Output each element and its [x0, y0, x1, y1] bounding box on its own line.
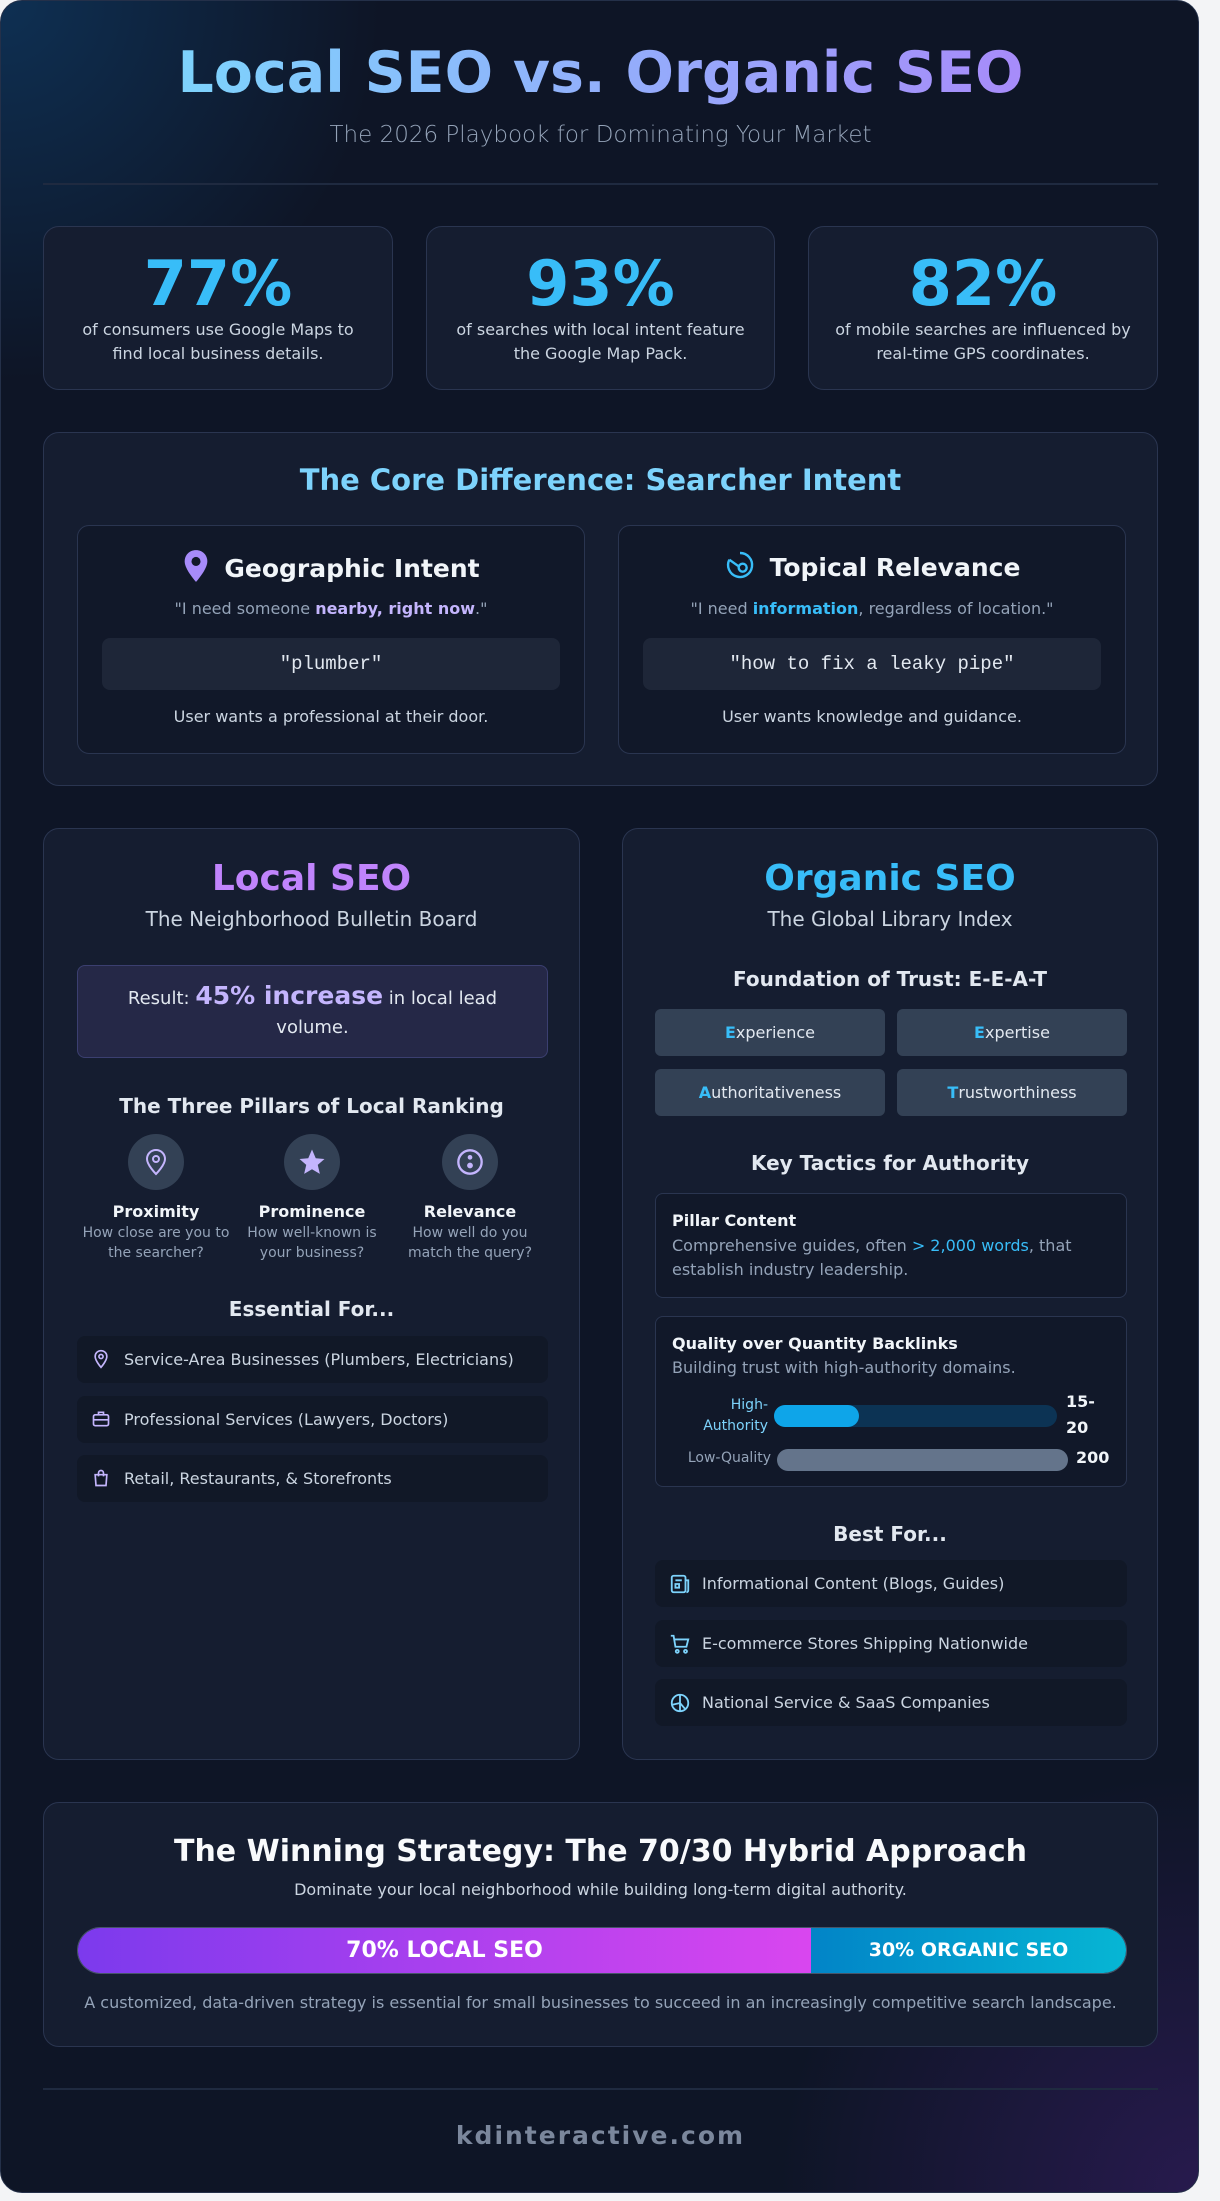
eeat heading: Foundation of Trust: E-E-A-T [733, 967, 1047, 991]
subtitle: The 2026 Playbook for Dominating Your Market [329, 122, 872, 148]
pillar prominence [247, 1134, 377, 1261]
card: topical: "I need information, regardless of location." [690, 599, 1054, 618]
stat 77 [43, 226, 393, 390]
stat 82: 82% [909, 247, 1057, 320]
panel: organic seo: The Global Library Index [767, 907, 1013, 931]
card: geographic: User wants a professional at their door. [174, 707, 488, 726]
split bar [77, 1927, 1127, 1974]
panel: organic seo [622, 828, 1158, 1760]
title local: Local SEO [212, 858, 411, 899]
tactic: pillar content: Comprehensive guides, often > 2,000 words, that establish industry leadership. [672, 1236, 1072, 1279]
pillars heading: The Three Pillars of Local Ranking [119, 1094, 504, 1118]
eeat grid: Experience [725, 1023, 815, 1042]
split bar: 30% ORGANIC SEO [869, 1939, 1068, 1961]
stat 93: 93% [526, 247, 675, 320]
card: geographic: "plumber" [280, 653, 382, 675]
pillar relevance: Relevance [424, 1202, 516, 1221]
tactic: backlinks chart: Low-Quality [688, 1450, 771, 1466]
pillar proximity: How close are you to the searcher? [83, 1225, 229, 1261]
result callout [77, 965, 548, 1058]
pillar proximity [83, 1134, 229, 1261]
item informational: Informational Content (Blogs, Guides) [702, 1574, 1004, 1593]
result callout: Result: 45% increase in local lead volume. [128, 981, 497, 1038]
eeat grid [655, 1009, 1127, 1116]
strategy title: The Winning Strategy: The 70/30 Hybrid Approach [174, 1834, 1027, 1869]
tactic: backlinks chart: High- [731, 1397, 768, 1413]
essential heading: Essential For... [229, 1297, 394, 1321]
heading topical: Topical Relevance [770, 553, 1020, 582]
best for heading: Best For... [833, 1522, 947, 1546]
card: topical: User wants knowledge and guidance. [722, 707, 1022, 726]
item retail: Retail, Restaurants, & Storefronts [124, 1469, 392, 1488]
tactic: backlinks chart: 15- [1066, 1392, 1095, 1411]
item retail [77, 1455, 548, 1502]
eeat grid: Expertise [974, 1023, 1050, 1042]
tactic: pillar content [655, 1193, 1127, 1298]
tactic: backlinks chart [655, 1316, 1127, 1487]
item service-area [77, 1336, 548, 1383]
title organic: Organic SEO [764, 858, 1016, 899]
item professional [77, 1396, 548, 1443]
title: Local SEO vs. Organic SEO [177, 40, 1024, 106]
footer: kdinteractive.com [456, 2121, 745, 2150]
pillar prominence: How well-known is your business? [247, 1225, 377, 1261]
panel: core difference [43, 432, 1158, 786]
heading: The Core Difference: Searcher Intent [300, 463, 901, 497]
item professional: Professional Services (Lawyers, Doctors) [124, 1410, 448, 1429]
card: geographic [77, 525, 585, 754]
panel: winning strategy: Dominate your local neighborhood while building long-term digital authority. [294, 1880, 907, 1899]
item informational [655, 1560, 1127, 1607]
tactic: backlinks chart: Quality over Quantity Backlinks [672, 1334, 958, 1353]
tactics heading: Key Tactics for Authority [751, 1151, 1029, 1175]
card: topical: "how to fix a leaky pipe" [729, 653, 1015, 675]
item ecommerce [655, 1620, 1127, 1667]
tactic: backlinks chart: 20 [1066, 1418, 1088, 1437]
pillar relevance: How well do you match the query? [408, 1225, 532, 1261]
item service-area: Service-Area Businesses (Plumbers, Electricians) [124, 1350, 514, 1369]
stat 77: 77% [144, 247, 292, 320]
pillar prominence: Prominence [259, 1202, 365, 1221]
stat 77: of consumers use Google Maps to find local business details. [82, 320, 354, 363]
panel: local seo [43, 828, 580, 1760]
item national: National Service & SaaS Companies [702, 1693, 990, 1712]
panel: winning strategy: A customized, data-driven strategy is essential for small businesses to succeed in an increasingly competitive search landscape. [84, 1993, 1117, 2012]
stat 82: of mobile searches are influenced by real-time GPS coordinates. [835, 320, 1131, 363]
tactic: pillar content: Pillar Content [672, 1211, 796, 1230]
split bar: 70% LOCAL SEO [346, 1938, 543, 1963]
panel: winning strategy [43, 1802, 1158, 2047]
pillar proximity: Proximity [113, 1202, 199, 1221]
stat 82 [808, 226, 1158, 390]
eeat grid: Authoritativeness [699, 1083, 841, 1102]
card: geographic: "I need someone nearby, right now." [175, 599, 487, 618]
heading geographic: Geographic Intent [224, 554, 480, 583]
tactic: backlinks chart: Building trust with high-authority domains. [672, 1358, 1016, 1377]
tactic: backlinks chart: Authority [703, 1418, 768, 1434]
eeat grid: Trustworthiness [947, 1083, 1077, 1102]
stat 93 [426, 226, 775, 390]
item national [655, 1679, 1127, 1726]
item ecommerce: E-commerce Stores Shipping Nationwide [702, 1634, 1028, 1653]
stat 93: of searches with local intent feature the Google Map Pack. [456, 320, 745, 363]
tactic: backlinks chart: 200 [1076, 1448, 1109, 1467]
card: topical [618, 525, 1126, 754]
pillar relevance [408, 1134, 532, 1261]
panel: local seo: The Neighborhood Bulletin Board [146, 907, 477, 931]
